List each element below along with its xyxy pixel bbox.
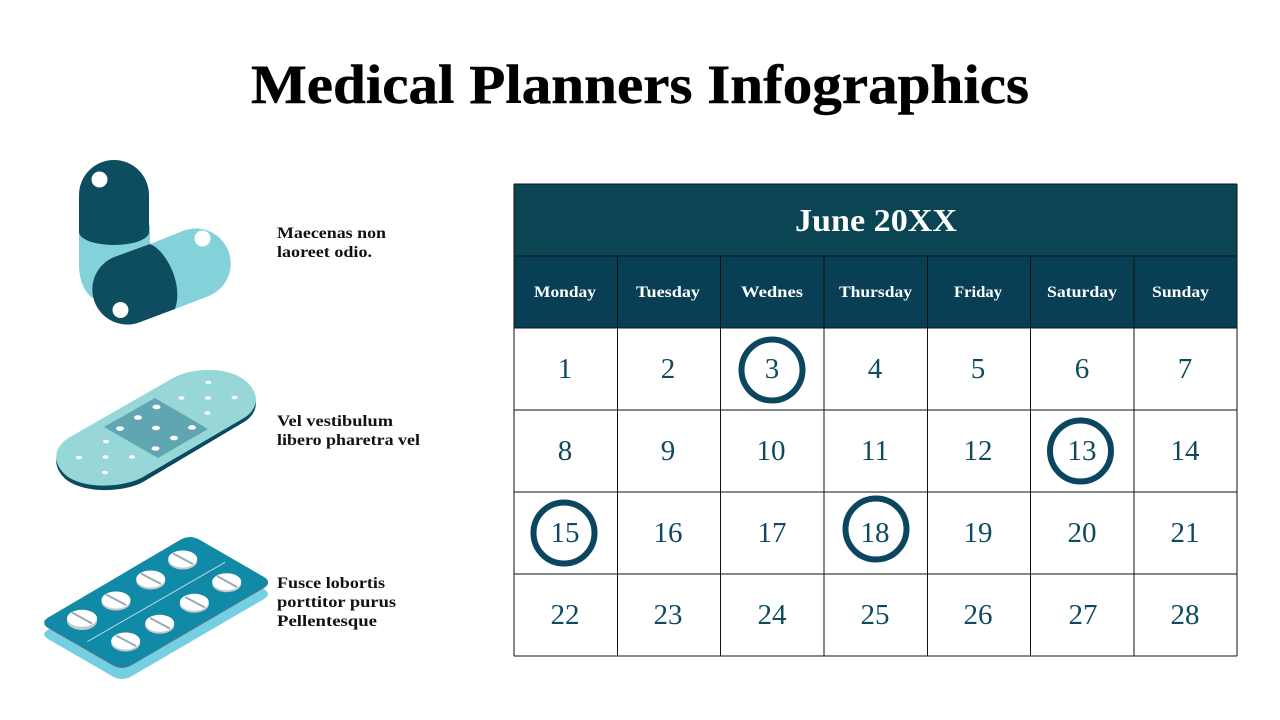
date numbers: 18 <box>860 517 890 549</box>
text: blister caption <box>277 575 396 630</box>
text: blister caption: Pellentesque <box>277 613 377 630</box>
date numbers: 4 <box>868 353 883 385</box>
text: capsule caption <box>277 225 386 261</box>
date numbers: 7 <box>1178 353 1192 385</box>
date numbers: 14 <box>1170 435 1200 467</box>
title: Medical Planners Infographics <box>251 54 1029 115</box>
date numbers: 8 <box>558 435 572 467</box>
tablet <box>168 550 197 570</box>
date numbers: 12 <box>964 435 992 467</box>
date numbers: 27 <box>1068 599 1098 631</box>
date numbers: 13 <box>1068 435 1096 467</box>
icon: bandage <box>56 370 256 490</box>
date numbers: 22 <box>550 599 580 631</box>
date numbers: 19 <box>964 517 992 549</box>
tablet <box>212 573 241 592</box>
date numbers: 16 <box>654 517 682 549</box>
date numbers: 21 <box>1170 517 1200 549</box>
date numbers: 5 <box>971 353 985 385</box>
icon: capsules <box>79 160 231 325</box>
date numbers <box>550 353 1200 631</box>
weekday header: Wednes <box>741 284 803 301</box>
month header <box>514 184 1237 256</box>
text: blister caption: porttitor purus <box>277 594 396 611</box>
weekday header <box>514 256 1237 328</box>
weekday header: Sunday <box>1152 284 1209 301</box>
weekday header: Thursday <box>839 284 912 301</box>
date numbers: 11 <box>861 435 889 467</box>
date numbers: 6 <box>1075 353 1089 385</box>
tablet <box>180 594 209 613</box>
month header: June 20XX <box>795 202 957 238</box>
text: bandage caption <box>277 413 421 449</box>
text: bandage caption: libero pharetra vel <box>277 432 421 449</box>
date numbers: 24 <box>758 599 787 631</box>
text: capsule caption: laoreet odio. <box>277 244 372 261</box>
weekday header: Friday <box>954 284 1002 301</box>
text: bandage caption: Vel vestibulum <box>277 413 394 430</box>
date numbers: 9 <box>661 435 675 467</box>
date numbers: 1 <box>558 353 572 385</box>
date numbers: 20 <box>1068 517 1096 549</box>
date numbers: 28 <box>1170 599 1200 631</box>
icon: blister pack <box>44 537 268 679</box>
date numbers: 26 <box>964 599 992 631</box>
text: capsule caption: Maecenas non <box>277 225 386 242</box>
date numbers: 17 <box>758 517 786 549</box>
weekday header: Saturday <box>1047 284 1117 301</box>
date numbers: 23 <box>654 599 682 631</box>
weekday header: Monday <box>534 284 596 301</box>
date numbers: 3 <box>765 353 779 385</box>
weekday header: Tuesday <box>636 284 700 301</box>
tablet <box>102 592 130 610</box>
calendar <box>514 184 1237 656</box>
tablet <box>145 615 174 634</box>
date numbers: 25 <box>860 599 890 631</box>
date numbers: 10 <box>756 435 786 467</box>
text: blister caption: Fusce lobortis <box>277 575 385 592</box>
tablet <box>111 632 140 652</box>
highlighted dates <box>534 340 1111 564</box>
tablet <box>136 570 165 590</box>
tablet <box>67 610 97 630</box>
date numbers: 15 <box>550 517 580 549</box>
date numbers: 2 <box>661 353 675 385</box>
